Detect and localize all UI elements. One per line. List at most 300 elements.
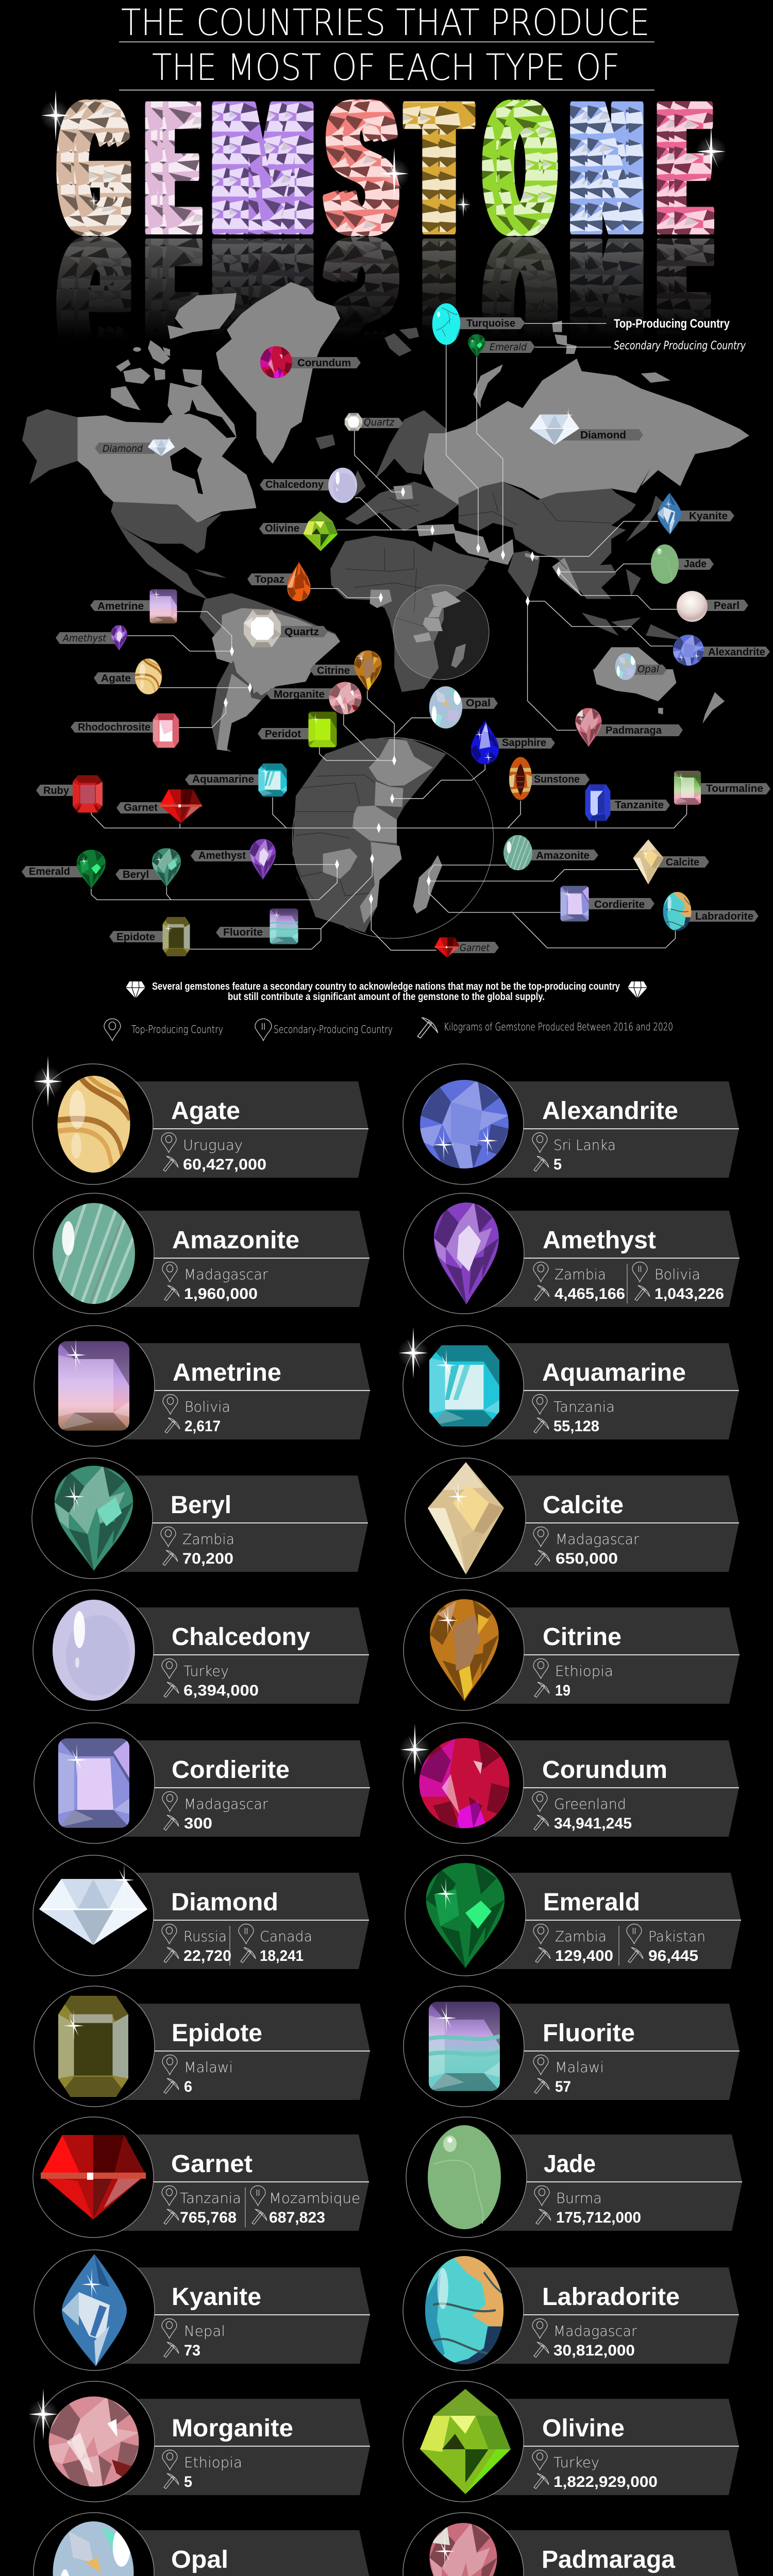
map label: Opal: Opal <box>466 698 491 709</box>
map label: Jade <box>651 545 714 584</box>
map label: Opal secondary: Opal <box>637 664 660 675</box>
note text <box>152 981 620 1003</box>
location markers <box>224 487 561 904</box>
Europe and Scandinavia <box>345 410 459 531</box>
top producer: 765,768 <box>180 2209 237 2226</box>
name: Aquamarine <box>542 1359 686 1386</box>
top producer <box>161 1527 234 1548</box>
top producer <box>532 2318 637 2340</box>
map label: Kyanite: Kyanite <box>689 511 728 522</box>
Africa borders <box>345 548 429 626</box>
map label: Epidote: Epidote <box>116 931 155 943</box>
name: Jade <box>544 2150 596 2178</box>
top producer: Zambia <box>554 1266 606 1283</box>
map label: Beryl <box>115 848 182 887</box>
map land north and central <box>22 282 749 752</box>
Poland, Turkey, Iran, Pakistan <box>393 485 514 565</box>
card: Agate <box>32 1064 368 1184</box>
top producer <box>162 2185 241 2226</box>
heading: GEMSTONE wordmark: O <box>489 66 551 270</box>
card: Emerald <box>405 1855 741 1976</box>
legend <box>104 1018 673 1041</box>
icon: diamond left <box>126 981 145 998</box>
map label: Sapphire <box>469 720 555 765</box>
map label: Labradorite <box>663 892 759 931</box>
secondary producer <box>239 1924 312 1964</box>
gem: alexandrite <box>420 1080 509 1168</box>
gem: morganite <box>48 2397 139 2486</box>
map label: Padmaraga <box>574 708 683 747</box>
map label: Garnet <box>116 789 202 823</box>
gem: corundum <box>419 1738 509 1828</box>
map label: Ruby: Ruby <box>43 785 70 796</box>
card: Ametrine <box>34 1326 370 1446</box>
gem: opal <box>53 2521 134 2576</box>
production: 2,617 <box>184 1418 221 1435</box>
top producer <box>162 2450 242 2471</box>
card: Corundum <box>403 1723 739 1843</box>
map label: Quartz <box>244 609 328 648</box>
map label: Emerald: Emerald <box>29 866 70 877</box>
Asia borders <box>380 493 611 569</box>
card: Garnet <box>33 2117 369 2238</box>
top producer <box>534 2185 602 2207</box>
map label: Ruby <box>36 775 103 812</box>
gem: calcite <box>428 1462 504 1574</box>
map label: Amethyst: Amethyst <box>198 850 246 861</box>
production <box>534 1418 599 1435</box>
map label: Ametrine: Ametrine <box>97 601 144 612</box>
map label: Labradorite: Labradorite <box>695 911 753 922</box>
map label: Amazonite: Amazonite <box>536 850 590 861</box>
sparkle <box>398 1327 429 1379</box>
map label: Aquamarine: Aquamarine <box>192 774 254 785</box>
name: Amethyst <box>543 1227 656 1254</box>
legend: top-producing country: Top-Producing Country <box>131 1023 223 1036</box>
divider <box>627 1264 628 1303</box>
secondary producer: 1,043,226 <box>654 1285 724 1302</box>
map label: Rhodochrosite <box>71 714 179 748</box>
gem: fluorite <box>429 2002 500 2091</box>
production <box>164 2078 192 2095</box>
top producer <box>163 1394 230 1415</box>
map label: Sapphire: Sapphire <box>502 737 546 749</box>
map label: Agate <box>94 658 162 694</box>
map label: Calcite: Calcite <box>666 857 699 868</box>
name: Diamond <box>171 1889 278 1916</box>
secondary producer <box>632 1262 724 1302</box>
map label: Chalcedony: Chalcedony <box>265 479 324 490</box>
sparkle <box>399 1724 430 1775</box>
top producer: Bolivia <box>184 1398 230 1415</box>
map label: Kyanite <box>656 493 734 535</box>
gem: padmaraga <box>426 2522 501 2576</box>
card: Alexandrite <box>403 1064 739 1184</box>
top producer: Malawi <box>555 2059 604 2076</box>
top producer: Zambia <box>182 1531 234 1548</box>
map label: Emerald secondary <box>467 334 535 358</box>
map label: Tourmaline: Tourmaline <box>706 783 763 794</box>
heading: GEMSTONE wordmark: M <box>215 66 310 270</box>
top producer: Nepal <box>184 2323 225 2340</box>
Brazil, Argentina and Uruguay <box>212 608 340 751</box>
map label: Pearl: Pearl <box>714 600 740 612</box>
gem: epidote <box>58 1996 128 2097</box>
map label: Olivine <box>259 511 338 551</box>
connector lines north <box>127 324 678 670</box>
name: Ametrine <box>173 1359 281 1386</box>
icon: diamond right <box>628 981 647 998</box>
card: Aquamarine <box>403 1326 739 1446</box>
map label: Emerald secondary: Emerald <box>490 342 527 353</box>
production: 57 <box>555 2078 571 2095</box>
card: Amethyst <box>404 1193 740 1314</box>
map label: Citrine <box>310 650 383 691</box>
map label: Tanzanite <box>585 784 670 821</box>
card: Padmaraga <box>403 2513 739 2576</box>
map label: Tanzanite: Tanzanite <box>615 800 664 811</box>
gem: labradorite <box>425 2256 503 2364</box>
inset locator circle <box>393 585 489 680</box>
map label: Sunstone <box>509 757 590 800</box>
production: 19 <box>555 1682 570 1699</box>
Burma and Nepal <box>525 553 582 597</box>
top producer: Russia <box>183 1928 227 1945</box>
name: Olivine <box>542 2415 625 2442</box>
card: Fluorite <box>404 1986 740 2107</box>
gem: amethyst <box>430 1202 502 1305</box>
name: Fluorite <box>543 2020 635 2047</box>
map label: Amethyst secondary <box>56 625 128 651</box>
map label: Garnet: Garnet <box>124 802 158 814</box>
production <box>164 2342 200 2359</box>
gem: citrine <box>426 1599 502 1702</box>
card: Opal <box>33 2513 369 2576</box>
card: Chalcedony <box>33 1590 369 1710</box>
gem: diamond <box>39 1863 147 1945</box>
top producer <box>532 2450 599 2471</box>
map label: Aquamarine <box>185 764 287 796</box>
Madagascar <box>413 855 442 913</box>
inset land <box>292 739 446 933</box>
map label: Chalcedony <box>260 468 357 503</box>
production: 6,394,000 <box>183 1682 259 1699</box>
map label: Diamond secondary: Diamond <box>103 443 143 454</box>
gem: jade <box>428 2125 501 2229</box>
map label: Diamond secondary <box>95 436 175 456</box>
title <box>119 2 654 91</box>
map label: Jade: Jade <box>684 558 707 570</box>
map label: Emerald <box>22 850 107 889</box>
gem: garnet <box>41 2135 146 2219</box>
map label: Topaz <box>247 562 312 602</box>
heading: GEMSTONE wordmark: E <box>150 66 195 270</box>
secondary producer: Bolivia <box>654 1266 700 1283</box>
gem: ametrine <box>58 1338 129 1430</box>
top producer <box>532 1394 615 1415</box>
top producer: Ethiopia <box>184 2454 242 2471</box>
production <box>164 2473 192 2490</box>
production: 1,822,929,000 <box>553 2473 658 2490</box>
secondary producer: Canada <box>260 1928 312 1945</box>
top producer: Madagascar <box>556 1531 639 1548</box>
gem: agate <box>58 1076 130 1173</box>
name: Corundum <box>542 1756 667 1784</box>
secondary producer: 687,823 <box>269 2209 325 2226</box>
map label: Rhodochrosite: Rhodochrosite <box>78 722 150 733</box>
Iceland and Svalbard <box>315 328 419 449</box>
card: Amazonite <box>33 1193 369 1314</box>
map label: Fluorite <box>216 908 298 944</box>
map label: Amazonite <box>503 835 598 870</box>
divider <box>618 1926 619 1965</box>
top producer <box>162 1262 268 1283</box>
note about secondary countries <box>126 981 647 1003</box>
map label: Corundum: Corundum <box>297 358 351 369</box>
name: Garnet <box>171 2150 253 2178</box>
top producer: Zambia <box>555 1928 607 1945</box>
production: 5 <box>553 1156 562 1173</box>
top producer <box>162 1659 229 1680</box>
name: Opal <box>171 2546 228 2573</box>
map label: Quartz: Quartz <box>284 626 319 638</box>
map land south and inset <box>91 669 725 950</box>
card: Cordierite <box>34 1723 370 1843</box>
legend: top-producing country <box>104 1019 223 1041</box>
card: Beryl <box>32 1458 368 1579</box>
legend: kilograms produced <box>417 1018 673 1038</box>
card: Calcite <box>405 1458 739 1579</box>
card: Kyanite <box>34 2250 370 2370</box>
top producer: Malawi <box>184 2059 233 2076</box>
map label: Beryl: Beryl <box>123 869 149 880</box>
top producer <box>532 1132 616 1154</box>
top producer <box>533 1924 613 1964</box>
name: Calcite <box>543 1492 624 1519</box>
name: Alexandrite <box>542 1097 678 1125</box>
Asia <box>429 482 685 640</box>
Greenland <box>167 282 340 464</box>
Arctic islands <box>473 320 670 408</box>
name: Beryl <box>171 1492 231 1519</box>
top producer: 22,720 <box>183 1947 231 1964</box>
top producer: Uruguay <box>183 1137 243 1154</box>
production <box>534 2078 571 2095</box>
Australia and New Zealand <box>593 669 725 724</box>
production: 6 <box>184 2078 192 2095</box>
map label: Alexandrite: Alexandrite <box>708 647 765 658</box>
Bolivia <box>212 638 236 663</box>
map label: Garnet secondary <box>435 937 499 958</box>
Alaska <box>22 409 77 484</box>
map label: Alexandrite <box>673 635 770 666</box>
name: Kyanite <box>172 2283 261 2311</box>
top producer: 129,400 <box>555 1947 613 1964</box>
map label: Fluorite: Fluorite <box>223 927 263 938</box>
card: Labradorite <box>403 2250 739 2370</box>
name: Agate <box>171 1097 240 1125</box>
map label: Quartz secondary <box>345 413 403 431</box>
top producer <box>162 1924 231 1964</box>
top producer: Tanzania <box>553 1398 615 1415</box>
top producer: Madagascar <box>553 2323 637 2340</box>
top producer <box>162 1792 268 1812</box>
card: Diamond <box>33 1855 369 1976</box>
inset circle <box>292 738 494 938</box>
map legend: top-producing: Top-Producing Country <box>614 317 730 331</box>
gem: chalcedony <box>53 1600 135 1701</box>
name: Cordierite <box>172 1756 290 1784</box>
top producer <box>533 1527 639 1548</box>
note text: but still contribute a significant amount of the gemstone to the global supply. <box>228 991 545 1003</box>
production: 30,812,000 <box>553 2342 635 2359</box>
top producer: 4,465,166 <box>554 1285 625 1302</box>
gem: cordierite <box>58 1738 129 1828</box>
name: Padmaraga <box>542 2546 675 2573</box>
map label: Diamond: Diamond <box>580 430 626 441</box>
map label: Opal secondary <box>615 653 667 680</box>
map label: Citrine: Citrine <box>317 665 350 676</box>
production <box>534 1156 562 1173</box>
top producer: Turkey <box>553 2454 599 2471</box>
production: 175,712,000 <box>556 2209 641 2226</box>
name: Amazonite <box>172 1227 299 1254</box>
map label: Pearl <box>677 591 748 622</box>
name: Morganite <box>172 2415 293 2442</box>
production: 70,200 <box>182 1550 233 1567</box>
sparkle <box>28 2388 59 2440</box>
production: 73 <box>184 2342 200 2359</box>
production: 5 <box>184 2473 192 2490</box>
Africa <box>330 536 485 692</box>
heading: GEMSTONE wordmark: G <box>63 66 126 270</box>
Hudson Bay <box>170 447 203 494</box>
map label: Topaz: Topaz <box>255 574 284 585</box>
top producer <box>533 1659 613 1680</box>
map label: Amethyst secondary: Amethyst <box>62 633 107 644</box>
gem: kyanite <box>58 2253 130 2367</box>
map label: Calcite <box>633 839 709 885</box>
production: 34,941,245 <box>554 1815 632 1832</box>
production <box>163 1550 233 1567</box>
map label: Sunstone: Sunstone <box>534 774 580 785</box>
map label: Quartz secondary: Quartz <box>364 417 395 428</box>
top producer: Burma <box>556 2190 602 2207</box>
note text: Several gemstones feature a secondary country to acknowledge nations that may not be the top-producing country <box>152 981 620 992</box>
secondary producer: Pakistan <box>648 1928 705 1945</box>
map label: Peridot: Peridot <box>265 728 301 740</box>
map label: Morganite: Morganite <box>274 689 325 700</box>
map label: Padmaraga: Padmaraga <box>606 725 662 736</box>
Australia upper <box>594 647 665 670</box>
name: Emerald <box>543 1889 640 1916</box>
map label: Amethyst <box>191 839 277 880</box>
divider <box>229 1926 230 1965</box>
name: Labradorite <box>542 2283 680 2311</box>
top producer <box>162 2055 233 2076</box>
connector lines south <box>91 669 687 950</box>
gem: olivine <box>420 2389 511 2494</box>
production: 1,960,000 <box>184 1285 258 1302</box>
map label: Cordierite <box>560 886 654 922</box>
heading: GEMSTONE wordmark: S <box>331 66 393 270</box>
production <box>165 1418 221 1435</box>
card: Olivine <box>403 2381 739 2502</box>
world map <box>22 282 770 958</box>
map label: Garnet secondary: Garnet <box>460 942 490 954</box>
divider <box>245 2188 246 2227</box>
Canada <box>77 340 256 523</box>
top producer: Tanzania <box>180 2190 241 2207</box>
top producer: Greenland <box>554 1795 626 1812</box>
name: Chalcedony <box>172 1623 310 1651</box>
secondary producer <box>250 2185 360 2226</box>
map label: Peridot <box>258 711 337 748</box>
name: Epidote <box>172 2020 262 2047</box>
gem: amazonite <box>53 1203 139 1304</box>
top producer <box>161 1132 243 1154</box>
production: 300 <box>184 1815 212 1832</box>
Russia <box>424 359 749 504</box>
card: Jade <box>406 2117 742 2238</box>
inset borders <box>296 775 375 901</box>
map label: Diamond <box>530 408 643 445</box>
gem: emerald <box>422 1862 509 1969</box>
top producer <box>533 2055 604 2076</box>
top producer: Ethiopia <box>555 1663 613 1680</box>
map label: Cordierite: Cordierite <box>594 899 645 910</box>
secondary producer: 18,241 <box>260 1947 304 1964</box>
top producer: Turkey <box>183 1663 229 1680</box>
title: THE COUNTRIES THAT PRODUCE <box>121 2 650 44</box>
card: Citrine <box>404 1590 740 1710</box>
map label: Agate: Agate <box>101 673 131 684</box>
secondary producer: 96,445 <box>648 1947 698 1964</box>
gem: beryl <box>50 1465 138 1571</box>
production <box>164 1815 212 1832</box>
heading: GEMSTONE wordmark: N <box>575 66 639 270</box>
top producer <box>532 1792 626 1812</box>
map label: Morganite <box>266 682 362 714</box>
United States, Mexico and Central America <box>111 502 227 599</box>
card: Epidote <box>34 1986 370 2107</box>
name: Citrine <box>543 1623 621 1651</box>
secondary producer <box>627 1924 705 1964</box>
map label: Corundum <box>260 346 361 378</box>
top producer: Madagascar <box>184 1266 268 1283</box>
Nigeria <box>369 590 392 608</box>
inset highlighted countries <box>323 739 433 923</box>
gem: aquamarine <box>429 1345 499 1427</box>
South America <box>199 593 340 752</box>
legend: secondary-producing country <box>255 1019 393 1041</box>
secondary producer: Mozambique <box>269 2190 360 2207</box>
map label: Tourmaline <box>674 771 770 805</box>
sparkle <box>32 1056 63 1107</box>
map label: Opal <box>429 686 498 728</box>
map label: Epidote <box>109 917 190 956</box>
legend: kilograms produced: Kilograms of Gemstone Produced Between 2016 and 2020 <box>444 1021 673 1033</box>
map label: Olivine: Olivine <box>265 523 299 534</box>
reflection of gemstone wordmark <box>56 237 714 331</box>
production: 55,128 <box>553 1418 599 1435</box>
production <box>535 1550 618 1567</box>
title: THE MOST OF EACH TYPE OF <box>152 46 620 89</box>
legend: secondary-producing country: Secondary-Producing Country <box>274 1023 393 1036</box>
card: Morganite <box>34 2381 370 2502</box>
sparkles on wordmark <box>40 90 727 217</box>
top producer <box>533 1262 625 1302</box>
